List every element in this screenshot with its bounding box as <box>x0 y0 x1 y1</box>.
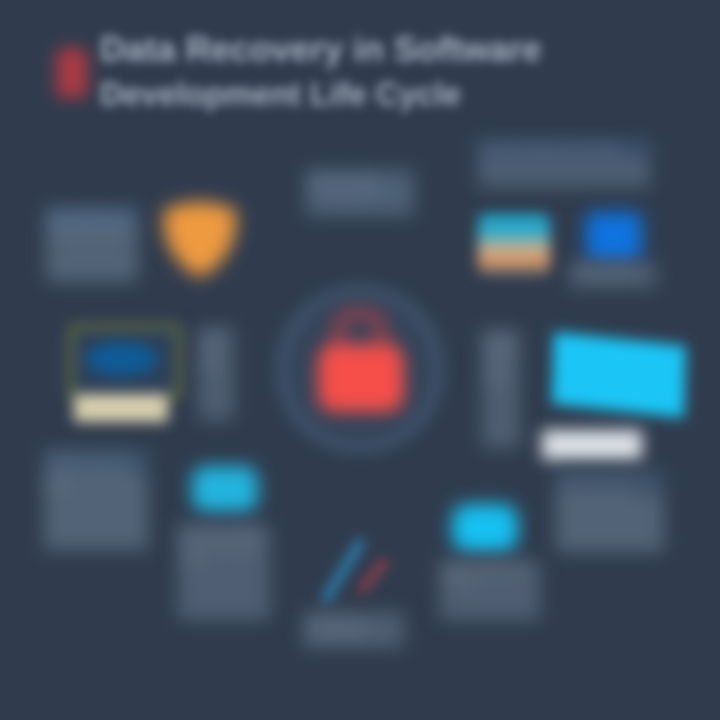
icon: cyan cloud right <box>452 504 518 552</box>
icon: blue square <box>586 212 642 262</box>
icon: rising arrows <box>316 534 394 608</box>
title <box>95 30 546 116</box>
blue icon caption <box>570 262 656 288</box>
top right text block: Backup strategy and storage <box>478 141 618 153</box>
icon: orange shield <box>150 188 250 289</box>
icon: landscape tile <box>478 214 550 276</box>
blue oval <box>86 342 158 376</box>
left text block <box>46 208 138 282</box>
top right text block <box>478 140 650 188</box>
blue icon caption: Cloud copies <box>570 263 634 275</box>
lower right text block: Team training and review <box>440 561 527 587</box>
title: Data Recovery in Software <box>100 30 542 69</box>
icon: cyan monitor <box>542 322 696 428</box>
left lower text block: Maintenance and incident response plans <box>44 451 130 491</box>
icon: cyan cloud left <box>192 466 258 512</box>
lower left text block <box>178 524 270 620</box>
left narrow text column: Code test data <box>198 329 224 369</box>
icon: red lock <box>304 298 418 426</box>
top centre text block <box>306 170 414 216</box>
arrows caption <box>304 612 404 648</box>
title: Development Life Cycle <box>100 76 461 112</box>
title icon: red square <box>56 48 88 98</box>
cream base <box>74 394 168 422</box>
central gauge ring <box>272 281 448 457</box>
right narrow text column <box>482 330 520 448</box>
left narrow text column <box>198 328 234 420</box>
right lower text block <box>556 470 664 552</box>
icon: database panel <box>62 318 188 432</box>
right lower text block: Monitoring logs and alerts over time <box>556 471 652 497</box>
top centre text block: Planning stage recovery goals <box>306 171 379 197</box>
lower left text block: Recovery testing for each release cycle <box>178 525 260 565</box>
left lower text block <box>44 450 148 550</box>
olive frame <box>68 324 182 400</box>
right narrow text column: Deploy restore verify steps <box>482 331 516 385</box>
arrows caption: Continuous improvement <box>304 613 368 639</box>
lower right text block <box>440 560 540 620</box>
left text block: Risk analysis and early data checks <box>46 209 132 235</box>
white label bar <box>542 430 642 460</box>
